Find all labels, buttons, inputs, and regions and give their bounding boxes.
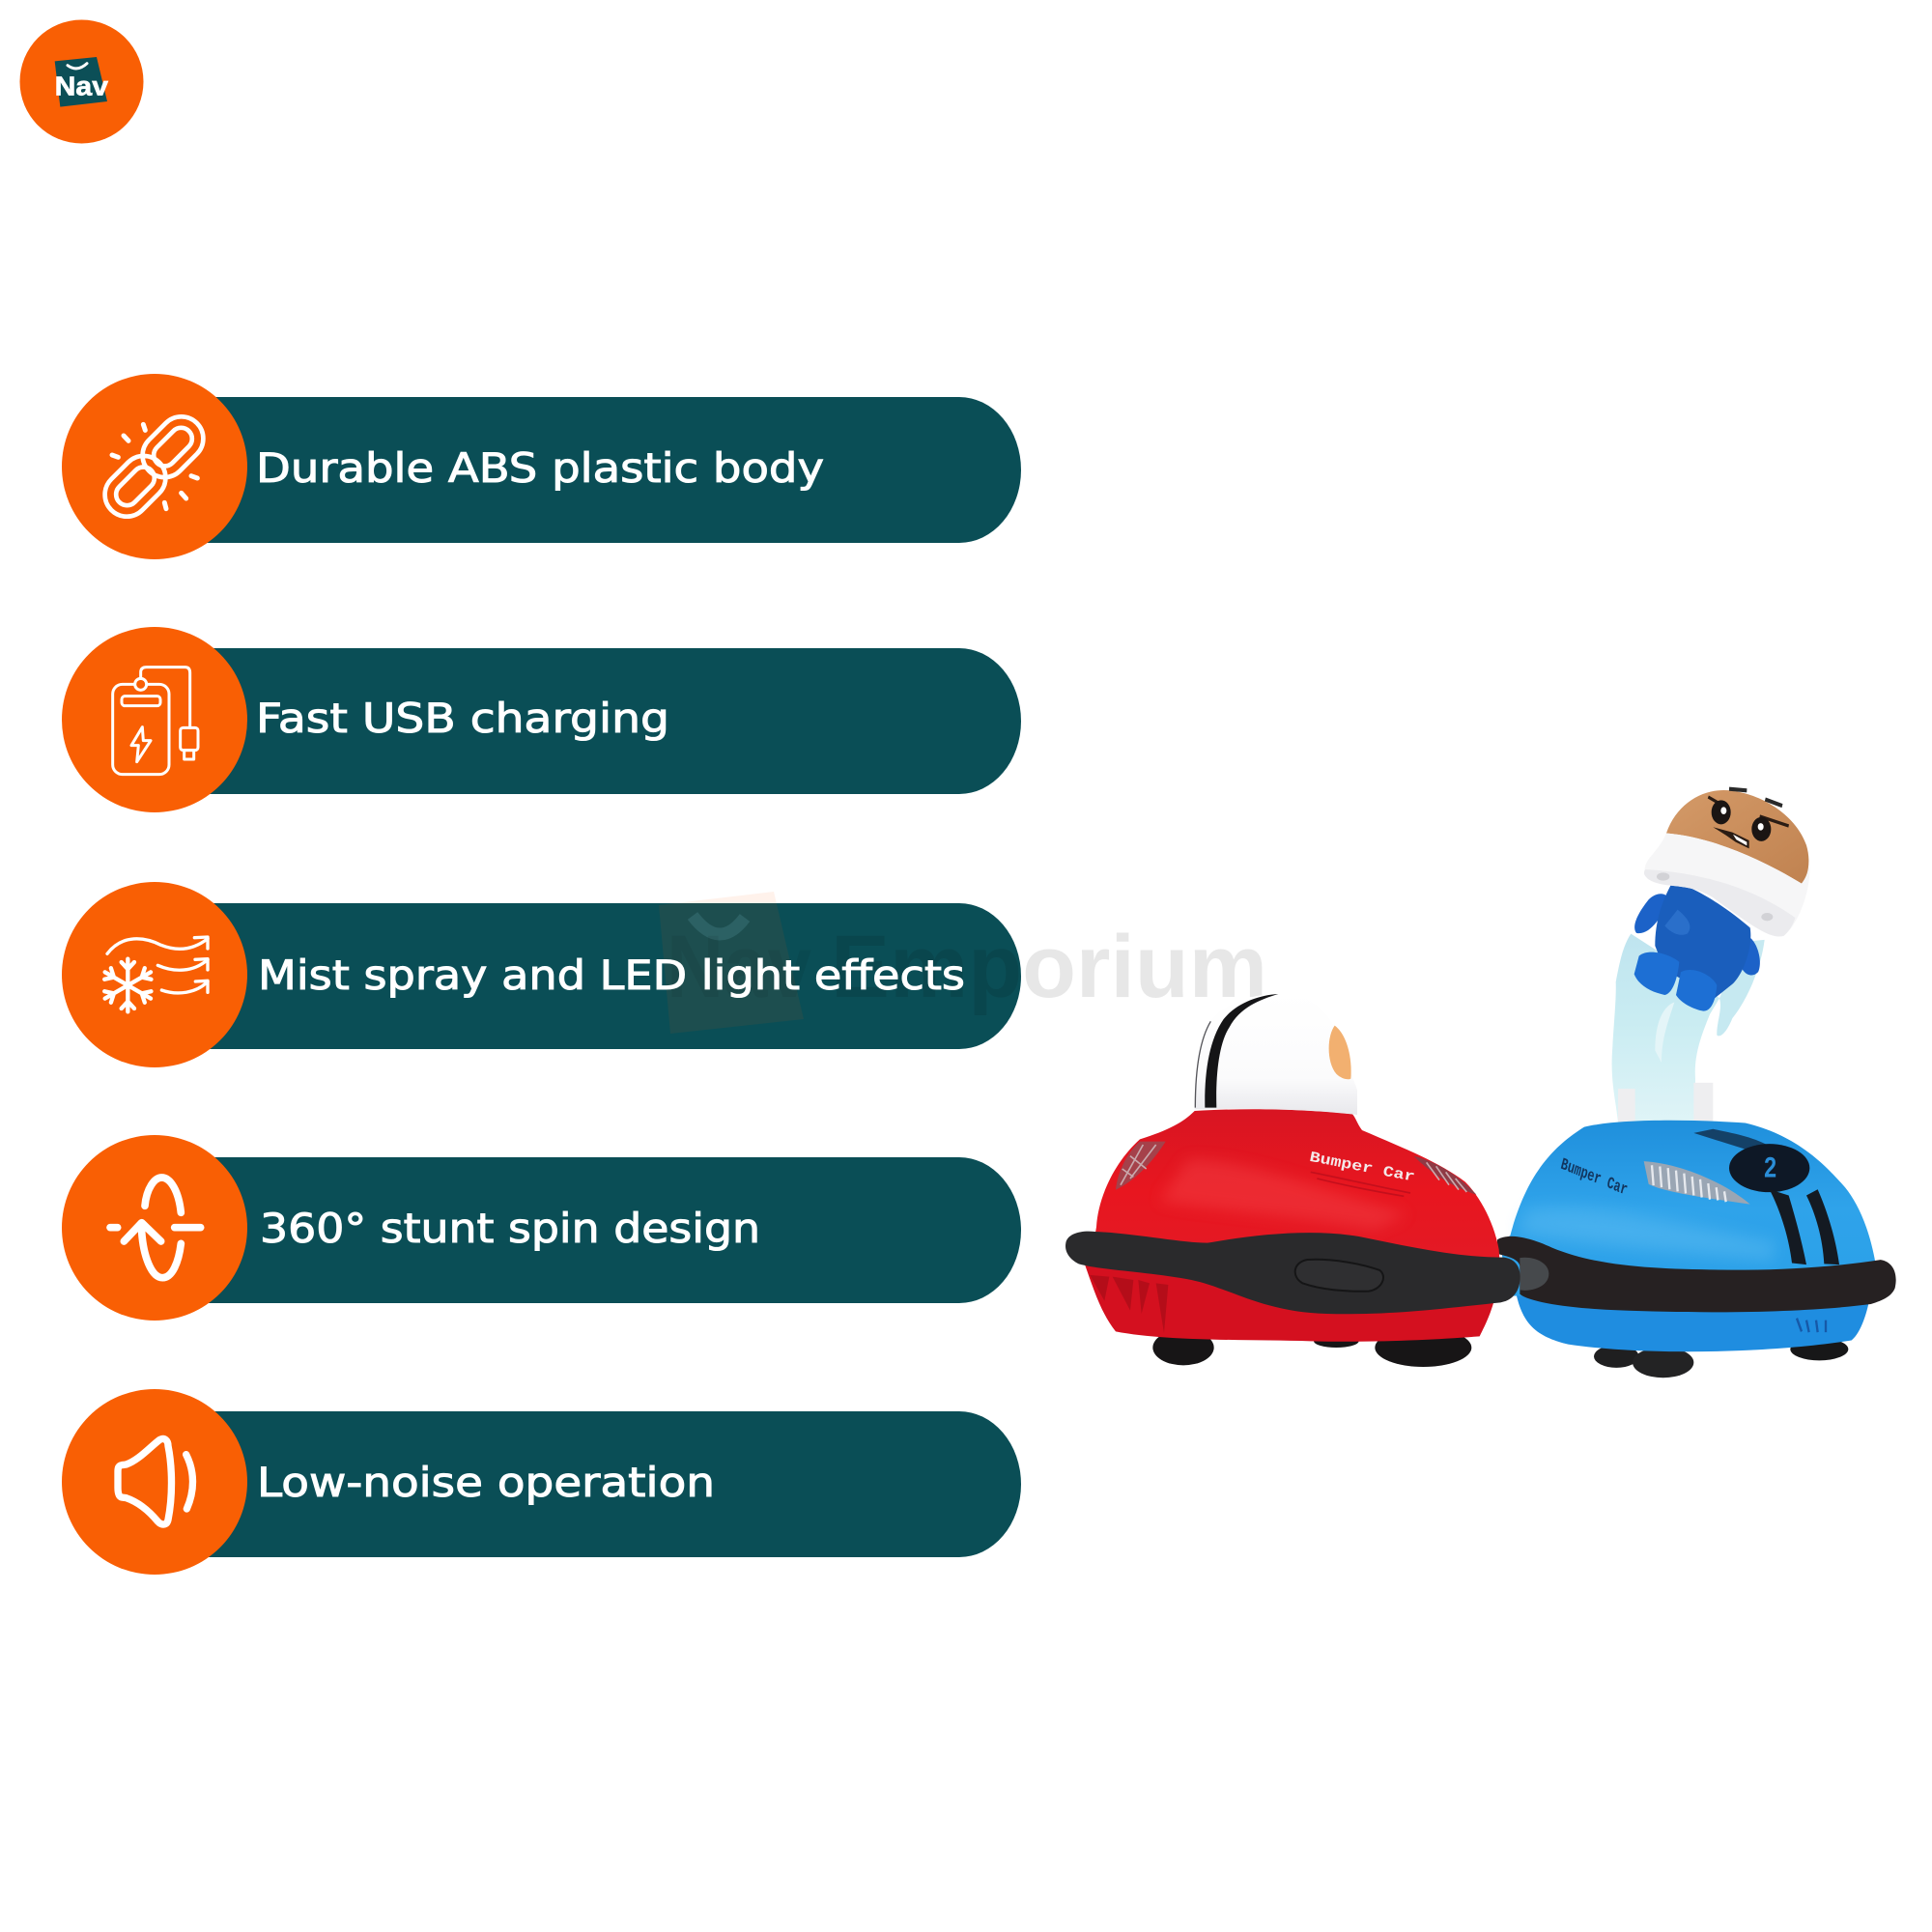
bumper pad <box>1520 1258 1548 1291</box>
red bumper car <box>1065 993 1520 1367</box>
feature bar 4 <box>155 1157 1021 1303</box>
bumper pad <box>1295 1260 1383 1292</box>
dome highlight <box>1159 1159 1407 1230</box>
number badge <box>1729 1144 1809 1192</box>
feature text 3: Mist spray and LED light effects <box>258 952 965 999</box>
right vent <box>1413 1156 1476 1195</box>
logo badge <box>19 19 143 143</box>
blue dome <box>1500 1121 1876 1296</box>
embossed lines <box>1311 1172 1410 1196</box>
blue bumper <box>1497 1236 1896 1312</box>
driver head <box>1644 789 1809 936</box>
top decal <box>1693 1129 1771 1150</box>
icon circle 1: chain link <box>62 374 247 559</box>
red bumper <box>1065 1232 1520 1314</box>
left vent <box>1116 1142 1166 1190</box>
feature text 5: Low-noise operation <box>257 1459 715 1506</box>
feature text 1: Durable ABS plastic body <box>256 444 824 492</box>
icon circle 4: spin <box>62 1135 247 1321</box>
racing stripes <box>1770 1189 1839 1264</box>
feature bar 5 <box>155 1411 1021 1557</box>
mist jet <box>1612 934 1765 1122</box>
watermark: Emporium <box>831 918 1267 1016</box>
lower hull <box>1085 1265 1497 1342</box>
watermark: Nav <box>667 918 811 1016</box>
face <box>1329 1026 1351 1079</box>
feature text 4: 360° stunt spin design <box>260 1205 760 1252</box>
helmet <box>1195 993 1357 1115</box>
wheels <box>1152 1328 1471 1367</box>
dome text: Bumper Car <box>1308 1149 1416 1186</box>
vent <box>1644 1161 1750 1205</box>
dome text: Bumper Car <box>1559 1155 1630 1200</box>
feature bar 1 <box>155 397 1021 543</box>
feature bar 3 <box>155 903 1021 1049</box>
feature bar 2 <box>155 648 1021 794</box>
icon circle 3: mist and snowflake <box>62 882 247 1067</box>
blue bumper car <box>1497 789 1896 1378</box>
feature text 2: Fast USB charging <box>256 695 669 742</box>
driver body <box>1634 882 1760 1011</box>
helmet edge <box>1195 1021 1210 1108</box>
red dome <box>1092 1109 1500 1275</box>
helmet stripe <box>1205 994 1278 1108</box>
icon circle 2: power bank <box>62 627 247 812</box>
dome highlight <box>1517 1208 1777 1260</box>
lower hull and wheels <box>1515 1288 1871 1378</box>
watermark <box>659 892 1267 1034</box>
icon circle 5: speaker <box>62 1389 247 1575</box>
mist pillars <box>1618 1083 1713 1123</box>
number badge: 2 <box>1764 1151 1776 1183</box>
logo badge: Nav <box>55 71 108 100</box>
